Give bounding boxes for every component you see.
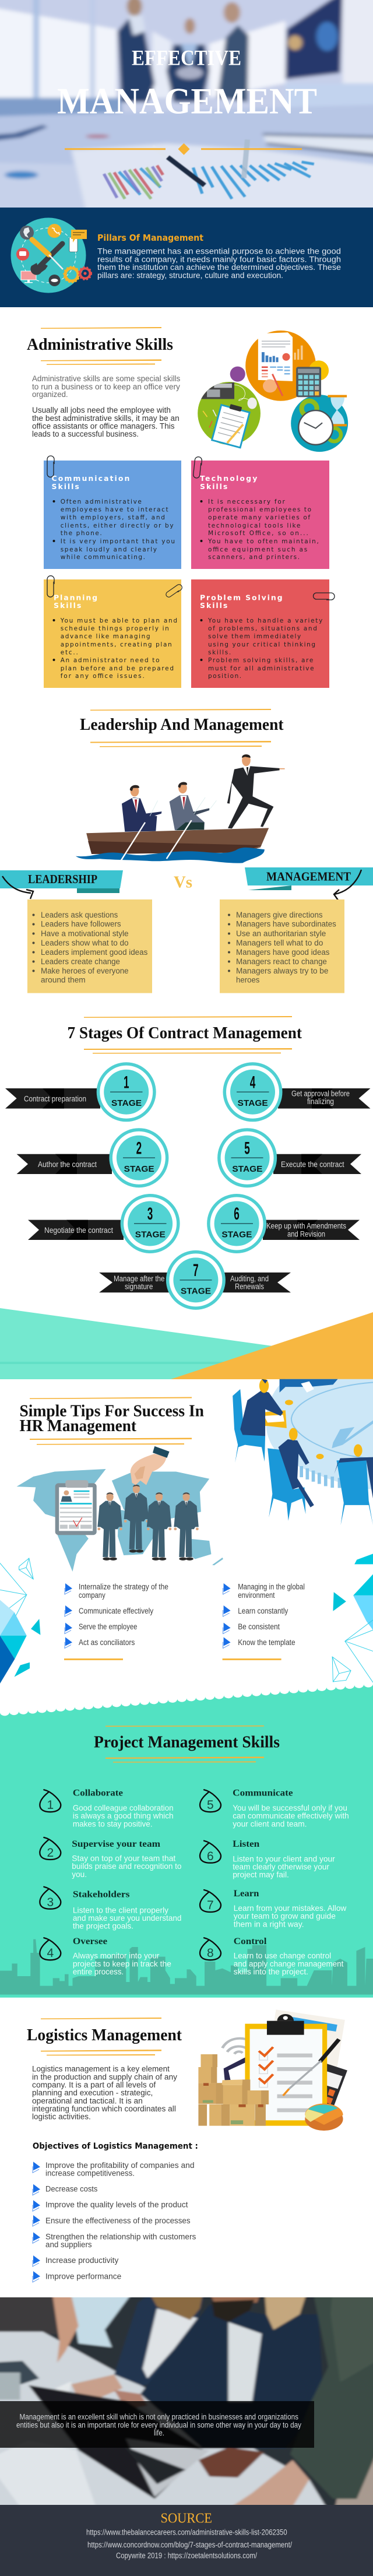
- card bullets: [200, 619, 203, 661]
- stage 7: [99, 1250, 291, 1310]
- arrow: management: [334, 870, 361, 900]
- list text: Managers have good ideas: [236, 948, 330, 957]
- closing photo: team around laptop: [0, 2297, 373, 2505]
- card list: while communicating.: [61, 554, 145, 561]
- skill 8: control: skills into the project.: [234, 1967, 308, 1976]
- text: logistics description: operational and tactical. It is an: [32, 2096, 143, 2105]
- stage 6: Keep up with Amendments: [266, 1222, 346, 1230]
- heading: logistics management: [27, 2018, 182, 2055]
- panel: leadership list: [27, 899, 152, 993]
- icon: tools and devices circle: [10, 218, 92, 293]
- list text: Use an authoritarian style: [236, 929, 326, 938]
- card list: Often administrative: [61, 498, 142, 505]
- stage 4: [223, 1062, 371, 1122]
- card list: professional employees to: [208, 506, 311, 513]
- decoration: right crystals: [332, 1554, 373, 1682]
- card list: scanners, and printers.: [208, 554, 300, 561]
- list: logistics objectives: and suppliers: [45, 2240, 92, 2249]
- skill 1: collaborate: 1: [47, 1798, 54, 1812]
- text: administrative intro: leads to a successful business.: [32, 430, 139, 438]
- hero title: [57, 46, 317, 122]
- card list: for any office issues.: [61, 673, 145, 680]
- stage 6: [207, 1194, 360, 1253]
- card list: solve them immediately: [208, 633, 301, 640]
- stage 1: [5, 1062, 156, 1122]
- panel: problem solving skills: [191, 579, 335, 688]
- heading: 7 stages of contract management: [68, 1016, 302, 1054]
- source links: [86, 2528, 292, 2560]
- arrow: leadership: [2, 876, 33, 899]
- stage 2: STAGE: [124, 1164, 154, 1174]
- skill 1: collaborate: makes to stay positive.: [73, 1819, 153, 1828]
- skill 1: collaborate: [40, 1788, 174, 1828]
- text: administrative intro: [32, 374, 181, 438]
- card list: must for all administrative: [208, 665, 314, 672]
- stage 7: Renewals: [235, 1282, 264, 1291]
- list: hr tips left column: Communicate effectively: [79, 1607, 153, 1615]
- card list: speak loudly and clearly: [61, 546, 157, 553]
- caption: management overlay: Management is an excellent skill which is not only practiced in businesses and organizations: [20, 2413, 298, 2422]
- list: logistics objectives: Strengthen the relationship with customers: [45, 2232, 196, 2241]
- card list: Microsoft Office, so on...: [208, 530, 308, 537]
- list: logistics objectives: increase competitiveness.: [45, 2169, 135, 2178]
- card list: skills.: [208, 649, 231, 656]
- list: hr tips right column: Managing in the global: [238, 1583, 305, 1591]
- skill 6: listen: [200, 1839, 335, 1879]
- list text: Leaders implement good ideas: [41, 948, 148, 957]
- heading: objectives of logistics management: Objectives of Logistics Management :: [33, 2142, 198, 2151]
- skill 8: control: 8: [207, 1946, 214, 1960]
- panel: management list: [220, 899, 344, 993]
- skill 5: communicate: You will be successful only if you: [233, 1803, 347, 1812]
- skill 2: supervise your team: 2: [47, 1846, 54, 1860]
- list text: [41, 911, 148, 985]
- text: administrative intro: Usually all jobs need the employee with: [32, 406, 171, 414]
- stage 5: Execute the contract: [281, 1160, 344, 1169]
- list text: Managers give directions: [236, 911, 323, 919]
- heading: leadership and management: [80, 709, 284, 747]
- list: logistics objectives: Improve the quality levels of the product: [45, 2201, 188, 2209]
- hero title: MANAGEMENT: [57, 80, 317, 122]
- card list: operate many varieties of: [208, 514, 310, 521]
- icon: paperclip right: [165, 584, 183, 599]
- skill 2: supervise your team: builds praise and recognition to: [72, 1861, 182, 1871]
- caption: management overlay: life.: [154, 2429, 164, 2437]
- list: hr tips left column: Serve the employee: [79, 1622, 137, 1631]
- stage 1: 1: [124, 1073, 129, 1092]
- list text: Leaders ask questions: [41, 911, 118, 919]
- card title: Planning: [54, 593, 97, 602]
- card title: [51, 474, 129, 491]
- card list: of problems, situations and: [208, 625, 317, 632]
- card list: using your critical thinking: [208, 641, 315, 648]
- text: pillars description: results of a company, it needs mainly four basic factors. Through: [97, 255, 341, 263]
- illustration: global recruitment map: [17, 1446, 223, 1572]
- skill 6: listen: Listen to your client and your: [233, 1854, 335, 1863]
- card list: technological tools like: [208, 522, 300, 529]
- skill 7: learn: Learn from your mistakes. Allow: [234, 1903, 347, 1913]
- icon: paperclip: [193, 456, 202, 479]
- skill 3: stakeholders: the project goals.: [73, 1921, 133, 1931]
- heading: administrative skills: [27, 327, 173, 365]
- card list: You have to often maintain,: [207, 538, 319, 545]
- card bullets: [52, 619, 55, 661]
- card bullets: [200, 500, 203, 542]
- text: logistics description: [32, 2065, 177, 2121]
- stage 7: Auditing, and: [230, 1274, 269, 1283]
- card title: Skills: [51, 482, 79, 491]
- card list: the phone.: [61, 530, 102, 537]
- hero divider with diamond: [65, 143, 302, 155]
- heading: simple tips for success in hr management: Simple Tips For Success In: [20, 1403, 204, 1421]
- skill 7: learn: your team to grow and guide: [234, 1911, 336, 1921]
- card title: [200, 474, 257, 491]
- card list: plan before and be prepared: [61, 665, 174, 672]
- card list: Problem solving skills, are: [208, 657, 313, 664]
- source links: https://www.concordnow.com/blog/7-stages-of-contract-management/: [87, 2540, 292, 2549]
- hero title: EFFECTIVE: [132, 46, 241, 70]
- heading: 7 stages of contract management: 7 Stages Of Contract Management: [68, 1024, 302, 1042]
- list: hr tips right column: Learn constantly: [238, 1607, 288, 1615]
- icon: paperclip: [314, 593, 335, 600]
- card list: [207, 617, 322, 680]
- stage 5: [217, 1128, 361, 1187]
- skill 6: listen: team clearly otherwise your: [233, 1862, 329, 1871]
- list: logistics objectives: Decrease costs: [45, 2185, 98, 2194]
- skill 6: listen: project may fail.: [233, 1870, 289, 1879]
- icon: paperclip: [47, 456, 54, 477]
- card title: Skills: [54, 601, 81, 610]
- list text: Leaders create change: [41, 957, 120, 966]
- skill 5: communicate: your client and team.: [233, 1819, 307, 1828]
- card list: advance like managing: [61, 633, 150, 640]
- list text: Leaders have followers: [41, 920, 121, 929]
- skill 7: learn: 7: [207, 1899, 214, 1912]
- stage 3: STAGE: [135, 1230, 166, 1240]
- heading: administrative skills: Administrative Skills: [27, 336, 173, 354]
- skill 7: learn: them in a right way.: [234, 1919, 304, 1928]
- skill 3: stakeholders: 3: [47, 1896, 54, 1909]
- panel: planning skills: [44, 576, 183, 688]
- panel: project management skills: [0, 1684, 373, 1998]
- skill 1: collaborate: is always a good thing which: [73, 1811, 174, 1821]
- card list: with employers, staff, and: [61, 514, 165, 521]
- skill 8: control: [200, 1937, 343, 1976]
- text: administrative intro: organized.: [32, 390, 68, 399]
- card list: You have to handle a variety: [207, 617, 322, 624]
- stage 4: STAGE: [238, 1098, 268, 1108]
- stage 3: 3: [147, 1204, 153, 1224]
- skill 1: collaborate: Collaborate: [73, 1788, 123, 1798]
- stage 1: Contract preparation: [24, 1094, 86, 1103]
- text: pillars description: The management has an essential purpose to achieve the good: [97, 247, 341, 256]
- card list: etc..: [61, 649, 78, 656]
- skill 5: communicate: 5: [207, 1798, 214, 1812]
- card list: appointments, creating plan: [61, 641, 172, 648]
- text: pillars description: pillars are: strategy, structure, culture and execution.: [97, 271, 283, 280]
- label ribbon: management: MANAGEMENT: [266, 870, 351, 884]
- list: hr tips right column: Know the template: [238, 1638, 295, 1647]
- skill 5: communicate: [200, 1788, 349, 1828]
- skill 7: learn: [200, 1889, 347, 1928]
- list: hr tips right column: environment: [238, 1591, 275, 1600]
- stage 2: 2: [136, 1138, 142, 1158]
- card title: Communication: [51, 474, 129, 483]
- stage 3: [28, 1194, 180, 1253]
- stage 5: STAGE: [232, 1164, 262, 1174]
- card list: It is neccessary for: [208, 498, 285, 505]
- label ribbon: leadership: LEADERSHIP: [28, 872, 97, 886]
- card title: Technology: [200, 474, 257, 483]
- stage 4: 4: [250, 1073, 255, 1092]
- skill 5: communicate: Communicate: [233, 1788, 293, 1798]
- skill 3: stakeholders: Stakeholders: [73, 1889, 129, 1899]
- heading: source: SOURCE: [161, 2511, 212, 2526]
- decoration: left crystals: [0, 1558, 40, 1684]
- skill 8: control: Learn to use change control: [234, 1951, 331, 1960]
- list: hr tips left column: Internalize the strategy of the: [79, 1583, 168, 1591]
- card title: Skills: [200, 482, 227, 491]
- heading: project management skills: [94, 1725, 280, 1763]
- skill 2: supervise your team: Stay on top of your team that: [72, 1853, 175, 1862]
- list: logistics objectives: Increase productivity: [45, 2256, 119, 2265]
- label ribbon: leadership: [0, 870, 123, 893]
- stage 7: Manage after the: [114, 1274, 164, 1283]
- list: logistics objectives: [33, 2161, 196, 2282]
- card list: employees have to interact: [61, 506, 168, 513]
- text: logistics description: integrating function which coordinates all: [32, 2104, 176, 2113]
- skill 2: supervise your team: Supervise your team: [72, 1839, 161, 1849]
- text: logistics description: planning and execution - strategic,: [32, 2089, 153, 2097]
- card title: Problem Solving: [200, 593, 283, 602]
- card list: It is very important that you: [61, 538, 175, 545]
- skill 8: control: and apply change management: [234, 1959, 343, 1968]
- text: logistics description: logistic activities.: [32, 2113, 91, 2121]
- skill 4: oversee: projects to keep in track the: [73, 1959, 171, 1968]
- list text: heroes: [236, 976, 260, 985]
- skill 5: communicate: can communicate effectively with: [233, 1811, 349, 1821]
- list text: Managers tell what to do: [236, 939, 323, 947]
- caption: management overlay: [0, 2401, 314, 2448]
- card list: clients, either directly or by: [61, 522, 174, 529]
- card title: [200, 593, 283, 610]
- skill 4: oversee: Always monitor into your: [73, 1951, 160, 1960]
- list bullets: [228, 914, 230, 972]
- stage 3: Negotiate the contract: [44, 1226, 113, 1235]
- card list: An administrator need to: [61, 657, 160, 664]
- list: hr tips left column: company: [79, 1591, 105, 1600]
- list text: Leaders show what to do: [41, 939, 129, 947]
- heading: simple tips for success in hr management: [20, 1397, 204, 1445]
- card list: schedule things properly in: [61, 625, 169, 632]
- stage 6: and Revision: [287, 1229, 325, 1238]
- panel: communication skills: [44, 456, 181, 569]
- illustration: boardroom meeting: [233, 1379, 373, 1525]
- text: logistics description: company. It is a part of all levels of: [32, 2081, 156, 2089]
- list: hr tips right column: [223, 1583, 305, 1660]
- stage 7: 7: [193, 1261, 199, 1280]
- skill 3: stakeholders: and make sure you understand: [73, 1913, 181, 1923]
- card title: Skills: [200, 601, 227, 610]
- list text: Managers always try to be: [236, 967, 328, 975]
- heading: simple tips for success in hr management: HR Management: [20, 1417, 137, 1435]
- stage 6: STAGE: [221, 1230, 252, 1240]
- card list: [60, 617, 177, 680]
- list text: [236, 911, 336, 985]
- stage 6: 6: [234, 1204, 240, 1224]
- heading: logistics management: Logistics Management: [27, 2026, 182, 2044]
- skill 4: oversee: 4: [47, 1946, 54, 1960]
- skill 6: listen: 6: [207, 1850, 214, 1863]
- skill 4: oversee: entire process.: [73, 1967, 124, 1976]
- panel: technology skills: [191, 456, 329, 569]
- text: versus: Vs: [174, 873, 192, 892]
- panel: source footer: [0, 2505, 373, 2576]
- text: pillars description: them the institution can achieve the determined objectives. These: [97, 263, 341, 272]
- skill 7: learn: Learn: [234, 1889, 259, 1899]
- text: pillars description: [97, 247, 341, 280]
- text: administrative intro: Administrative skills are some special skills: [32, 374, 181, 383]
- text: administrative intro: office assistants or office managers. This: [32, 422, 175, 430]
- caption: management overlay: entities but also it is an important role for every individual in some other way in your day to day: [16, 2420, 301, 2429]
- panel: pillars of management: [0, 208, 373, 307]
- source links: https://www.thebalancecareers.com/administrative-skills-list-2062350: [86, 2528, 287, 2536]
- source links: Copywrite 2019 : https://zoetalentsolutions.com/: [116, 2551, 257, 2560]
- stage 1: STAGE: [111, 1098, 142, 1108]
- list: hr tips left column: [64, 1583, 168, 1660]
- icon: office illustration: [198, 331, 348, 452]
- list text: Managers react to change: [236, 957, 327, 966]
- illustration: logistics checklist and boxes: [198, 2009, 347, 2131]
- skill 4: oversee: [40, 1937, 171, 1976]
- stage 5: 5: [244, 1138, 250, 1158]
- stage 2: [17, 1128, 168, 1187]
- list text: Managers have subordinates: [236, 920, 336, 929]
- illustration: managers rowing a boat: [76, 754, 285, 863]
- list: logistics objectives: Improve performance: [45, 2272, 121, 2280]
- skill 1: collaborate: Good colleague collaboration: [73, 1803, 174, 1812]
- card list: office equipment such as: [208, 546, 307, 553]
- heading: pillars of management: Pillars Of Management: [97, 233, 204, 243]
- label ribbon: management: [245, 867, 373, 890]
- heading: project management skills: Project Management Skills: [94, 1734, 280, 1752]
- text: logistics description: in the production and supply chain of any: [32, 2072, 177, 2081]
- card list: [61, 498, 175, 561]
- list bullets: [33, 914, 35, 972]
- card list: position.: [208, 673, 241, 680]
- skill 4: oversee: Oversee: [73, 1937, 107, 1946]
- list: logistics objectives: Improve the profitability of companies and: [45, 2161, 195, 2170]
- list: logistics objectives: Ensure the effectiveness of the processes: [45, 2216, 191, 2225]
- card list: [207, 498, 319, 561]
- stage 7: signature: [125, 1282, 153, 1291]
- list text: Make heroes of everyone: [41, 967, 129, 975]
- list text: around them: [41, 976, 86, 985]
- heading: leadership and management: Leadership And Management: [80, 716, 284, 734]
- list: hr tips left column: Act as conciliators: [79, 1638, 135, 1647]
- list text: Have a motivational style: [41, 929, 129, 938]
- skill 2: supervise your team: you.: [72, 1869, 87, 1879]
- card list: You must be able to plan and: [60, 617, 177, 624]
- skill 3: stakeholders: [40, 1887, 181, 1931]
- decorative teal and orange band: [0, 1308, 373, 1379]
- skill 3: stakeholders: Listen to the client properly: [73, 1905, 168, 1914]
- list: hr tips right column: Be consistent: [238, 1622, 280, 1631]
- card title: [54, 593, 97, 610]
- text: administrative intro: to run a business or to keep an office very: [32, 382, 180, 391]
- text: administrative intro: the best administrative skills, it may be an: [32, 414, 180, 423]
- stage 4: Get approval before: [291, 1090, 350, 1098]
- icon: paperclip left: [47, 576, 54, 597]
- card bullets: [52, 500, 55, 542]
- stage 2: Author the contract: [38, 1160, 97, 1169]
- stage 4: finalizing: [307, 1097, 334, 1106]
- stage 7: STAGE: [181, 1287, 211, 1296]
- hero photo: business meeting: [0, 0, 373, 221]
- skill 8: control: Control: [234, 1937, 267, 1946]
- text: logistics description: Logistics management is a key element: [32, 2065, 170, 2074]
- skill 6: listen: Listen: [233, 1839, 259, 1849]
- skyline silhouette: [0, 1939, 373, 1995]
- skill 2: supervise your team: [40, 1837, 182, 1879]
